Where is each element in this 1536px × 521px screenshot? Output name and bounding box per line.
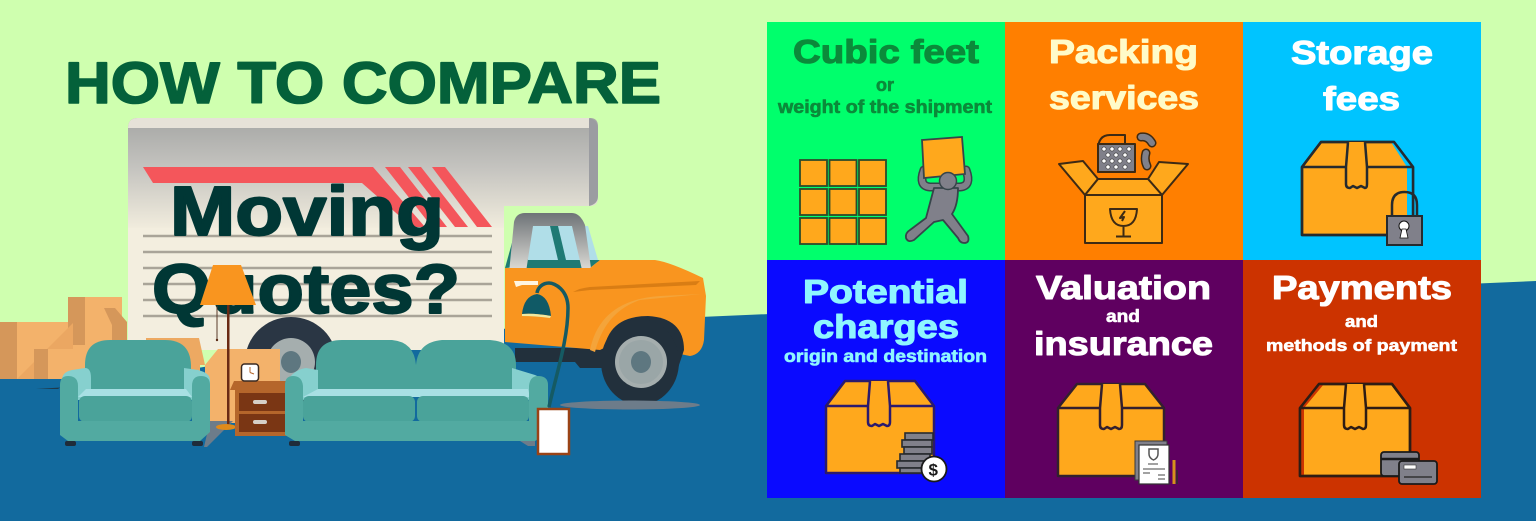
truck rear wheel bbox=[245, 317, 337, 407]
truck side slats bbox=[143, 236, 492, 316]
text: weight of the shipment: weight of the shipment bbox=[777, 97, 992, 117]
heading: storage: Storage bbox=[1291, 34, 1433, 71]
icon: box with padlock bbox=[1302, 142, 1422, 245]
background ground bbox=[0, 281, 1536, 521]
title: HOW TO COMPARE bbox=[65, 51, 661, 116]
armchair bbox=[60, 340, 210, 446]
icon: person carrying box bbox=[906, 137, 968, 243]
heading: payments: Payments bbox=[1272, 269, 1452, 306]
illustration: moving truck and furniture bbox=[0, 118, 706, 410]
text: or: or bbox=[876, 75, 894, 95]
large box behind lamp bbox=[146, 338, 280, 423]
text: and: and bbox=[1106, 306, 1140, 326]
icon: nightstand bbox=[230, 381, 290, 436]
picture frame bbox=[538, 409, 569, 454]
truck front wheel bbox=[601, 316, 684, 405]
heading: fees: fees bbox=[1323, 80, 1400, 117]
truck cab bbox=[505, 213, 706, 405]
icon: arc floor lamp bbox=[522, 283, 568, 407]
heading: packing: Packing bbox=[1049, 33, 1198, 70]
text: and: and bbox=[1345, 312, 1378, 331]
panel: valuation and insurance bbox=[1005, 260, 1243, 498]
icon: clock bbox=[242, 364, 258, 381]
heading: Quotes: Quotes? bbox=[152, 250, 460, 328]
panel: packing services bbox=[1005, 22, 1243, 260]
truck shadow bbox=[560, 400, 700, 410]
text: origin and destination: origin and destination bbox=[784, 346, 987, 366]
panel: cubic feet bbox=[767, 22, 1005, 260]
icon: orange floor lamp bbox=[200, 265, 256, 430]
icon: open box with bubble wrap bbox=[1059, 135, 1188, 243]
truck cargo box lower bbox=[128, 200, 504, 350]
text: methods of payment: methods of payment bbox=[1266, 336, 1457, 355]
floor shadow bbox=[204, 421, 233, 447]
heading: cubic feet: Cubic feet bbox=[793, 33, 979, 70]
icon: grid of boxes bbox=[800, 160, 886, 244]
heading: charges: charges bbox=[813, 308, 959, 345]
heading: services: services bbox=[1049, 79, 1199, 116]
cardboard boxes bbox=[0, 297, 127, 389]
icon: box with coins bbox=[826, 381, 946, 482]
panel: storage fees bbox=[1243, 22, 1481, 260]
heading: valuation: Valuation bbox=[1036, 269, 1211, 306]
text: dollar sign: $ bbox=[928, 460, 938, 480]
panel: payments bbox=[1243, 260, 1481, 498]
sofa bbox=[285, 340, 548, 446]
heading: Moving: Moving bbox=[170, 172, 444, 250]
panel: potential charges bbox=[767, 260, 1005, 498]
icon: box with policy document bbox=[1058, 384, 1177, 484]
truck red stripes bbox=[143, 167, 492, 227]
truck cargo box upper bbox=[128, 118, 598, 228]
furniture bbox=[60, 265, 569, 454]
heading: insurance: insurance bbox=[1034, 325, 1213, 362]
icon: box with credit cards bbox=[1300, 384, 1437, 484]
truck body bbox=[128, 118, 598, 407]
heading: potential: Potential bbox=[803, 273, 968, 310]
